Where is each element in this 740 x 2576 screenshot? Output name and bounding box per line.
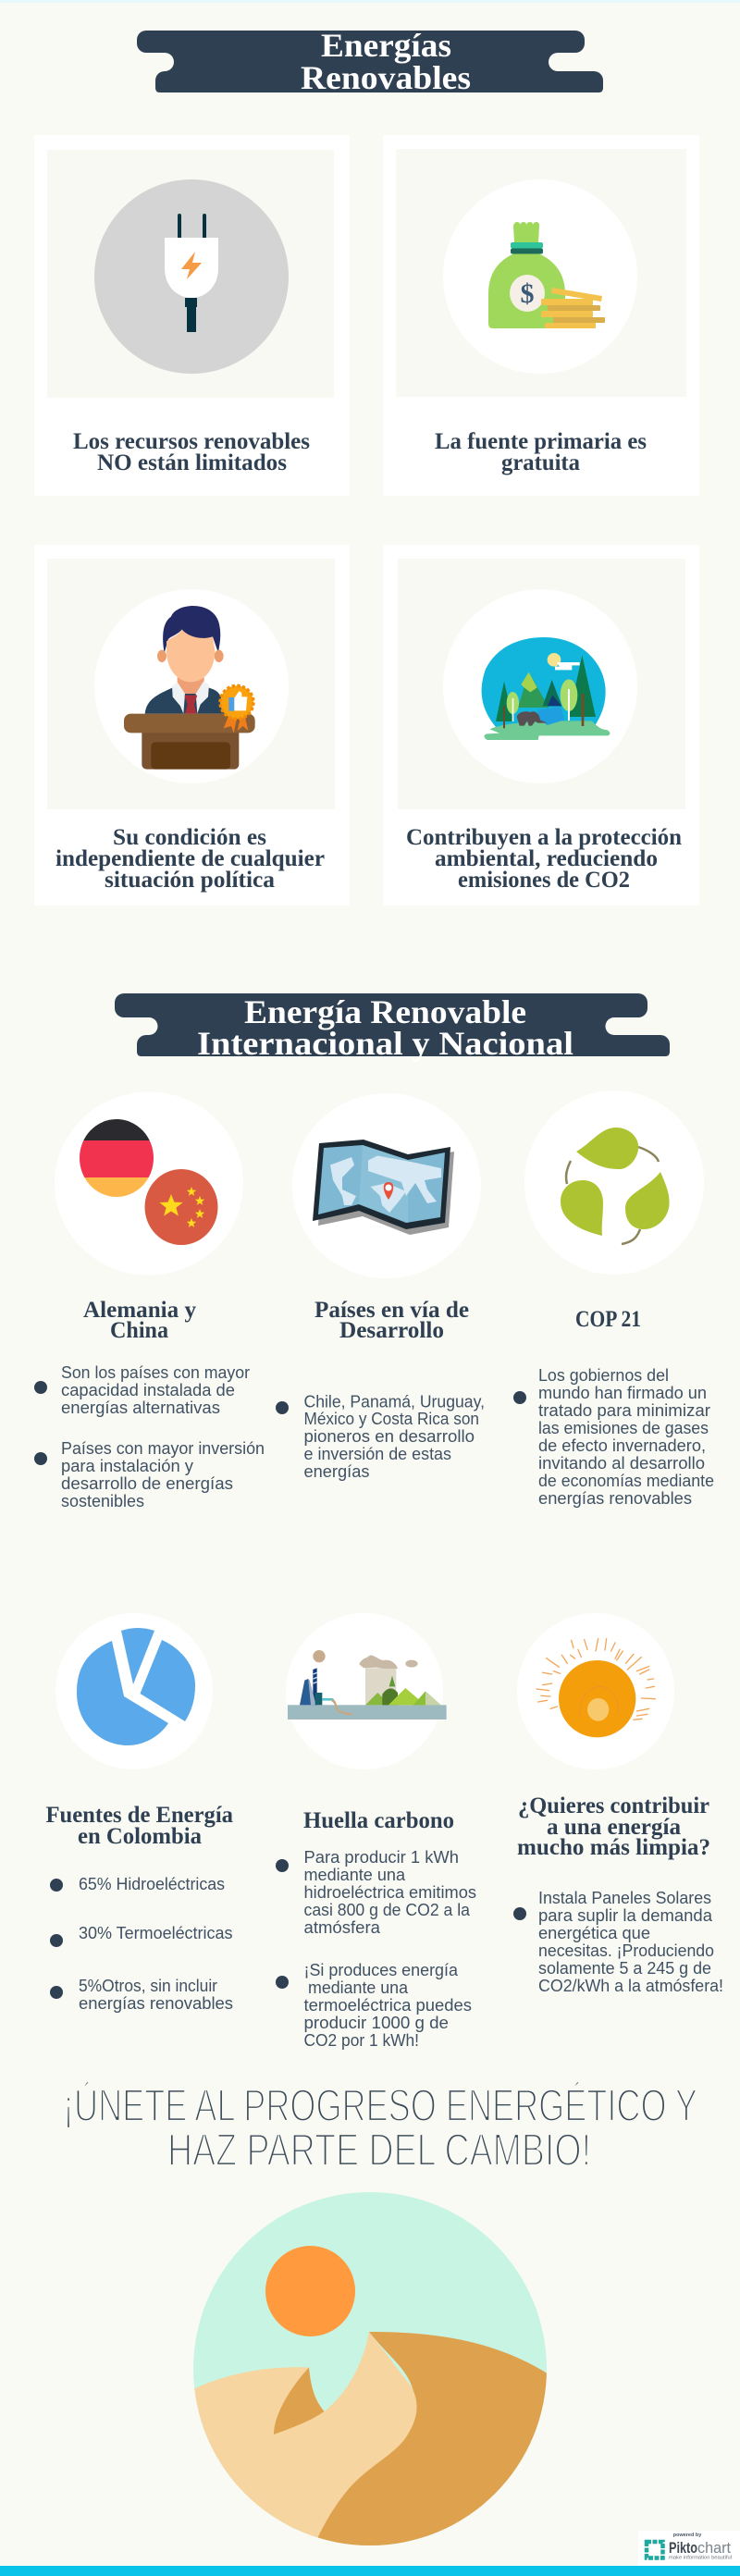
bullet list: capacidad instalada de <box>61 1381 235 1399</box>
bullet list: energías renovables <box>79 1994 233 2013</box>
title banner: Energías Renovables: Energías <box>321 27 451 64</box>
bullet list: sostenibles <box>61 1492 144 1510</box>
bullet text: México y Costa Rica son <box>303 1410 479 1428</box>
bullet list <box>50 1875 233 2013</box>
bullet list: energías alternativas <box>61 1399 220 1417</box>
card text <box>56 825 325 893</box>
card text: La fuente primaria es <box>435 429 647 454</box>
bullet text: Instala Paneles Solares <box>538 1889 711 1907</box>
heading: a una energía <box>547 1815 681 1840</box>
logo: Piktochart <box>638 2531 740 2566</box>
bullet list: 65% Hidroeléctricas <box>79 1875 225 1893</box>
panel: recursos no limitados <box>34 135 350 496</box>
bullet list: para instalación y <box>61 1457 193 1475</box>
logo: Piktochart: chart <box>697 2539 731 2557</box>
bullet list: Son los países con mayor <box>61 1363 250 1382</box>
heading: Alemania y <box>83 1298 196 1323</box>
bullet text: CO2/kWh a la atmósfera! <box>538 1977 723 1995</box>
bullet list: ¡Si produces energía <box>303 1961 459 1979</box>
title banner: Energías Renovables: Renovables <box>301 59 471 96</box>
card text: ambiental, reduciendo <box>435 846 658 871</box>
bullet text: necesitas. ¡Produciendo <box>538 1941 714 1960</box>
heading: Países en vía de <box>314 1298 469 1323</box>
icon: money bag with coins: $ <box>520 278 535 309</box>
heading <box>46 1803 233 1849</box>
bullet text: pioneros en desarrollo <box>303 1427 475 1446</box>
footer band <box>0 2566 740 2576</box>
panel: independiente de la política <box>34 545 350 906</box>
column: COP 21 <box>513 1091 714 1508</box>
bullet list: hidroeléctrica emitimos <box>303 1883 476 1902</box>
bullet text: e inversión de estas <box>303 1445 451 1463</box>
bullet list: 30% Termoeléctricas <box>79 1924 233 1942</box>
card text <box>435 429 647 475</box>
bullet text: Los gobiernos del <box>538 1366 669 1385</box>
bullet text: Chile, Panamá, Uruguay, <box>303 1393 485 1411</box>
icon: sun with rays <box>536 1639 655 1737</box>
icon: power plant and hills <box>288 1650 447 1719</box>
card text <box>73 429 310 475</box>
heading: COP 21 <box>575 1307 641 1332</box>
card text: Su condición es <box>113 825 266 850</box>
bullet text: para suplir la demanda <box>538 1906 713 1925</box>
pie chart icon <box>77 1628 195 1745</box>
card text: gratuita <box>501 450 580 475</box>
icon: money bag with coins <box>488 222 605 328</box>
section banner: Energía Renovable Internacional y Nacional: Energía Renovable <box>244 993 526 1030</box>
heading: ¿Quieres contribuir <box>518 1793 709 1818</box>
heading: Desarrollo <box>339 1318 444 1343</box>
column: Alemania y China <box>34 1091 265 1510</box>
column: Huella carbono <box>276 1613 476 2050</box>
bullet list: Países con mayor inversión <box>61 1439 265 1458</box>
heading: China <box>110 1318 168 1343</box>
card text: independiente de cualquier <box>56 846 325 871</box>
bullet text: energías renovables <box>538 1489 692 1508</box>
bullet list: atmósfera <box>303 1918 381 1937</box>
section banner: Energía Renovable Internacional y Nacional: Internacional y Nacional <box>197 1025 574 1062</box>
bullet list: mediante una <box>303 1866 406 1884</box>
closing headline: HAZ PARTE DEL CAMBIO! <box>167 2126 591 2175</box>
title banner: Energías Renovables <box>137 27 603 96</box>
bullet text: de economías mediante <box>538 1472 714 1490</box>
card text: emisiones de CO2 <box>458 868 630 893</box>
heading: Huella carbono <box>303 1808 454 1833</box>
bullet list: desarrollo de energías <box>61 1474 233 1493</box>
bullet text <box>513 1366 714 1508</box>
icon: electric plug <box>165 214 218 332</box>
bullet text <box>513 1889 723 1995</box>
heading: en Colombia <box>78 1824 202 1849</box>
bullet list: termoeléctrica puedes <box>303 1996 472 2015</box>
section banner: Energía Renovable Internacional y Nacional <box>115 993 670 1062</box>
column: Fuentes de Energía en Colombia <box>46 1613 233 2013</box>
panel: fuente primaria gratuita <box>383 135 699 496</box>
panel: protección ambiental <box>383 545 699 906</box>
bullet list <box>276 1848 476 2050</box>
icon: folded world map <box>313 1140 454 1235</box>
bullet text: las emisiones de gases <box>538 1419 709 1437</box>
column: Países en vía de Desarrollo <box>276 1093 485 1481</box>
heading: Fuentes de Energía <box>46 1803 233 1828</box>
bullet list: casi 800 g de CO2 a la <box>303 1901 471 1919</box>
bullet list <box>34 1363 265 1510</box>
bullet text: tratado para minimizar <box>538 1401 710 1420</box>
bullet text: de efecto invernadero, <box>538 1436 706 1455</box>
heading: mucho más limpia? <box>517 1835 710 1860</box>
icon: politician at podium <box>124 606 255 770</box>
heading <box>314 1298 469 1343</box>
logo: Piktochart: make information beautiful <box>669 2555 732 2560</box>
bullet list: mediante una <box>308 1978 409 1997</box>
logo: Piktochart: Pikto <box>669 2539 697 2557</box>
card text: Los recursos renovables <box>73 429 310 454</box>
heading <box>517 1793 710 1860</box>
bullet text: energética que <box>538 1924 650 1942</box>
bullet list: producir 1000 g de <box>303 2014 449 2032</box>
bullet text: solamente 5 a 245 g de <box>538 1959 711 1978</box>
bullet list: Para producir 1 kWh <box>303 1848 459 1867</box>
heading <box>83 1298 196 1343</box>
card text: Contribuyen a la protección <box>406 825 682 850</box>
bullet text: invitando al desarrollo <box>538 1454 705 1473</box>
logo: Piktochart: powered by <box>673 2533 702 2538</box>
bullet list: CO2 por 1 kWh! <box>303 2031 419 2050</box>
icon: forest landscape <box>482 637 610 740</box>
icon: three recycling leaves <box>561 1128 670 1244</box>
bullet list: 5%Otros, sin incluir <box>79 1977 217 1995</box>
column: ¿Quieres contribuir? <box>513 1613 723 1995</box>
card text: situación política <box>105 868 276 893</box>
bullet text: energías <box>303 1462 370 1481</box>
bullet text <box>276 1393 485 1481</box>
illustration: desert dunes and sun <box>190 2192 550 2553</box>
icon: flags of Germany and China <box>80 1118 218 1245</box>
closing headline <box>63 2081 697 2175</box>
card text <box>406 825 682 893</box>
card text: NO están limitados <box>97 450 287 475</box>
bullet text: mundo han firmado un <box>538 1384 707 1402</box>
